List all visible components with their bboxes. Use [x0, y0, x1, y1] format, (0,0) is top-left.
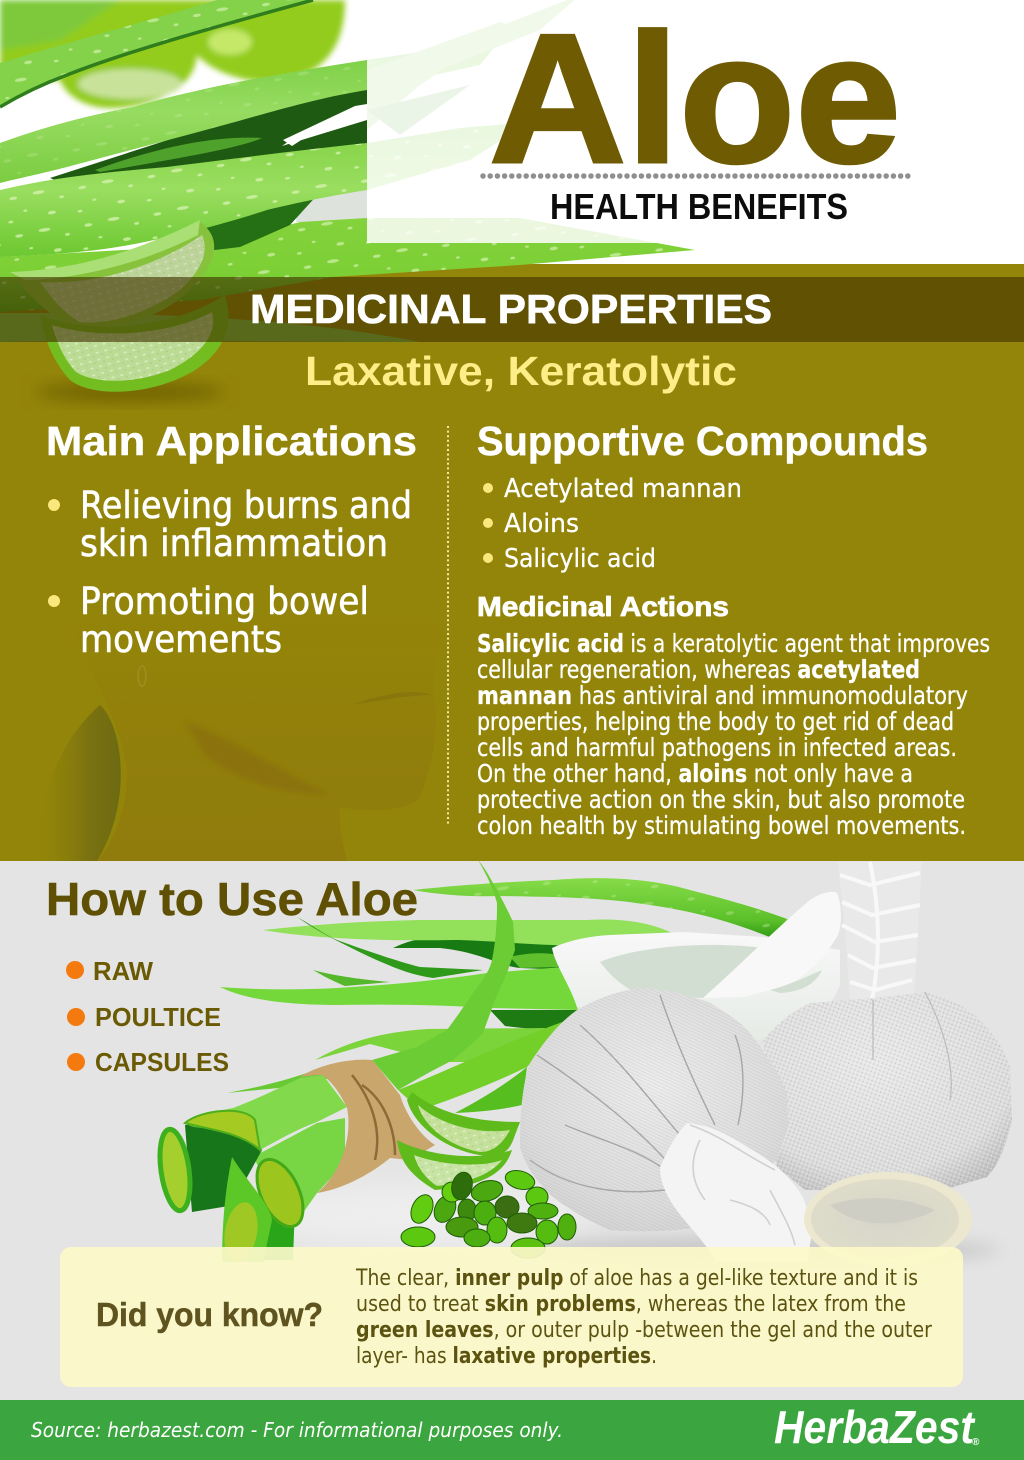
leaf: below band	[0, 313, 420, 342]
did you know text: green leaves, or outer pulp -between the gel and the outer	[356, 1318, 933, 1343]
leaf: inner small	[95, 138, 262, 172]
aloe slices	[397, 1092, 520, 1190]
illustration: aloe, poultices and capsules	[155, 860, 1012, 1266]
properties: laxative, keratolytic: Laxative, Keratolytic	[305, 348, 737, 394]
faded face photo	[39, 610, 448, 861]
blurred aloe slices behind	[0, 0, 345, 108]
heading: medicinal properties: MEDICINAL PROPERTIES	[250, 286, 772, 332]
did you know heading: Did you know?	[96, 1296, 323, 1333]
medicinal actions paragraph	[477, 629, 990, 840]
ground highlight and shadow	[250, 1185, 590, 1245]
compound list: Aloins	[504, 509, 579, 539]
panel: main applications	[46, 418, 417, 661]
footer	[0, 1400, 1024, 1460]
panel: supportive compounds	[477, 418, 990, 840]
did you know text: used to treat skin problems, whereas the latex from the	[356, 1292, 906, 1317]
leaf: long top	[413, 878, 795, 938]
leaf: second	[263, 920, 672, 948]
heading: supportive compounds: Supportive Compounds	[477, 418, 928, 464]
compound list: Salicylic acid	[504, 544, 656, 574]
subtitle: health benefits: HEALTH BENEFITS	[550, 186, 848, 227]
soft shadow beneath leaves	[296, 185, 367, 222]
dotted column divider	[447, 426, 449, 826]
leaf: small tip	[313, 970, 390, 986]
usage list: RAW	[93, 956, 153, 986]
did you know text: layer- has laxative properties.	[356, 1344, 657, 1369]
application list: Relieving burns and	[80, 484, 412, 527]
leaf: dark arc behind	[393, 938, 570, 970]
spiky tall leaf	[372, 860, 515, 1090]
leaf: lower thin	[315, 1028, 545, 1062]
poultice front	[520, 988, 813, 1262]
leaf: upper	[0, 0, 313, 107]
capsules	[401, 1167, 576, 1258]
white wash over photo	[367, 0, 1024, 243]
leaf: middle	[0, 40, 500, 183]
usage list	[66, 956, 229, 1077]
dotted rule	[483, 173, 908, 179]
leaf: third	[220, 967, 578, 1010]
heading: medicinal actions: Medicinal Actions	[477, 591, 729, 622]
application list	[48, 484, 412, 661]
heading: main applications: Main Applications	[46, 418, 417, 464]
gel dish	[804, 1172, 972, 1266]
leaf: main large	[0, 122, 530, 257]
mortar and pestle	[552, 892, 841, 1040]
leaf: dark lower	[160, 192, 320, 250]
aloe slice lower	[40, 295, 228, 392]
shadow under slice	[35, 383, 225, 401]
title: Aloe: Aloe	[489, 0, 901, 201]
application list: movements	[80, 618, 282, 661]
faded leaves behind title	[367, 22, 510, 130]
HerbaZest logo: HerbaZest	[774, 1401, 975, 1453]
leaf: lower back	[0, 218, 695, 312]
did you know text	[355, 1266, 933, 1369]
application list: skin inflammation	[80, 522, 388, 565]
twine	[300, 1060, 435, 1193]
did you know text: The clear, inner pulp of aloe has a gel-like texture and it is	[355, 1266, 918, 1291]
photo: aloe leaves header	[0, 0, 695, 401]
dark band	[0, 277, 1024, 342]
compound list: Acetylated mannan	[504, 474, 742, 504]
leaf: dark under	[297, 917, 483, 978]
panel: medicinal properties background	[0, 264, 1024, 861]
leaf underside dark	[50, 85, 367, 182]
panel: how to use background	[0, 861, 1024, 1400]
compound list	[483, 474, 742, 574]
leaf stem right	[398, 1020, 568, 1110]
poultice knot	[660, 1123, 813, 1262]
source line: Source: herbazest.com - For informational purposes only.	[31, 1418, 563, 1442]
poultice rear	[763, 862, 1012, 1190]
usage list: CAPSULES	[95, 1047, 229, 1077]
heading: how to use aloe: How to Use Aloe	[46, 873, 418, 925]
registered mark: ®	[972, 1437, 980, 1448]
aloe slice upper	[10, 220, 214, 328]
stems bundle	[155, 1075, 347, 1264]
callout: did you know	[60, 1247, 963, 1387]
usage list: POULTICE	[95, 1002, 221, 1032]
medicinal actions paragraph: cellular regeneration, whereas acetylated	[477, 655, 920, 684]
application list: Promoting bowel	[80, 580, 369, 623]
medicinal actions paragraph: On the other hand, aloins not only have a	[477, 759, 913, 788]
